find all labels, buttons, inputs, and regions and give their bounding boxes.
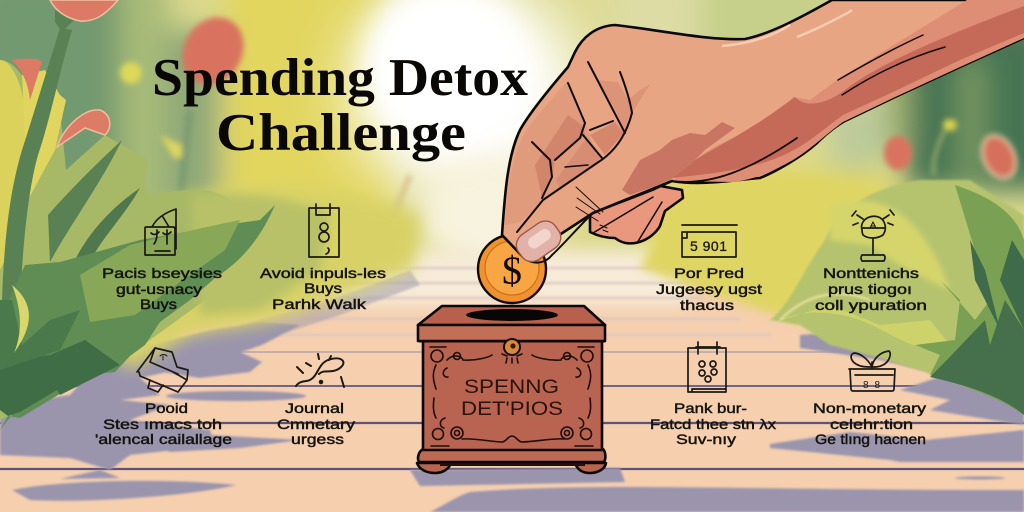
icon: wallet <box>137 348 188 392</box>
text: tip two <box>260 265 386 312</box>
text: tip eight <box>813 400 926 447</box>
text: tip one: gut-usnacy <box>116 281 202 297</box>
text: tip two: Avoid inpuls-les <box>260 265 386 281</box>
box label <box>461 377 563 420</box>
arm shadow band <box>672 6 1024 178</box>
floor shadows <box>0 270 1024 512</box>
icon: price tag: 5 901 <box>690 238 727 254</box>
text: tip two: Buys <box>304 280 342 296</box>
text: tip five <box>95 400 232 447</box>
skin highlights <box>722 10 852 46</box>
title: Spending Detox <box>152 49 529 107</box>
arm mid-tone band <box>672 0 1024 182</box>
icon: gift box <box>849 351 895 391</box>
text: tip five: 'alencal cailallage <box>95 431 232 447</box>
text: tip six <box>277 400 355 447</box>
box clasp <box>502 339 522 363</box>
text: tip four: coll ypuration <box>815 297 927 313</box>
coin slot <box>466 309 558 321</box>
right foreground plants <box>640 175 1024 415</box>
box scroll ornaments <box>430 347 594 446</box>
fingers behind thumb <box>590 185 683 243</box>
box label: DET'PIOS <box>461 399 563 420</box>
knuckle wrinkle shading <box>622 122 735 195</box>
text: tip four: Nonttenichs <box>823 265 919 281</box>
text: tip six: Journal <box>285 400 344 416</box>
icon: notepad <box>309 204 339 257</box>
text: tip four: prus tiogoı <box>828 281 912 297</box>
text: tip six: Cmnetary <box>277 416 355 432</box>
text: tip five: Pooid <box>145 400 188 416</box>
coin: $ <box>502 248 522 293</box>
blurred tulips <box>120 6 1024 250</box>
text: tip one: Pacis bseysies <box>102 265 222 281</box>
text: tip seven <box>650 400 776 447</box>
icon: journal squiggle <box>296 354 344 387</box>
text: tip seven: Fatcd thee stn λx <box>650 416 776 432</box>
box top lid <box>418 306 605 342</box>
left foreground plants <box>0 0 420 430</box>
title <box>152 49 529 162</box>
icon: price tag <box>682 225 737 257</box>
text: tip three: Jugeesy ugst <box>656 281 762 297</box>
text: tip seven: Suv-nıy <box>676 431 736 447</box>
box feet and base <box>417 449 606 473</box>
finger shading <box>505 80 650 225</box>
wooden floor <box>0 250 1024 512</box>
title: Challenge <box>216 104 466 162</box>
hand contour lines <box>517 35 945 263</box>
text: tip three: thacus <box>680 297 734 313</box>
wooden donation box <box>417 306 606 473</box>
text: tip four <box>815 265 927 313</box>
hand base shape <box>502 0 1024 258</box>
text: tip eight: Ge tlıng hacnen <box>815 431 926 447</box>
text: tip seven: Pank bur- <box>674 400 747 416</box>
text: tip two: Parhk Walk <box>272 296 367 312</box>
text: tip one <box>102 265 222 312</box>
thumbnail <box>512 216 566 266</box>
text: tip eight: Non-monetary <box>813 400 926 416</box>
text: tip one: Buys <box>140 296 177 312</box>
text: tip three: Por Pred <box>674 265 744 281</box>
box front panel <box>423 340 602 450</box>
icon: gift box: 88 <box>863 380 880 391</box>
text: tip three <box>656 265 762 313</box>
text: tip five: Stes ımacs toh <box>103 416 222 432</box>
text: tip eight: celehr:tion <box>830 416 913 432</box>
coin <box>478 235 546 303</box>
icon: alert lamp <box>852 210 894 261</box>
icon: calendar <box>688 342 726 392</box>
icon: document <box>145 209 176 255</box>
box label: SPENNG <box>464 377 559 398</box>
hand holding coin <box>502 0 1024 266</box>
text: tip six: urgess <box>291 431 344 447</box>
